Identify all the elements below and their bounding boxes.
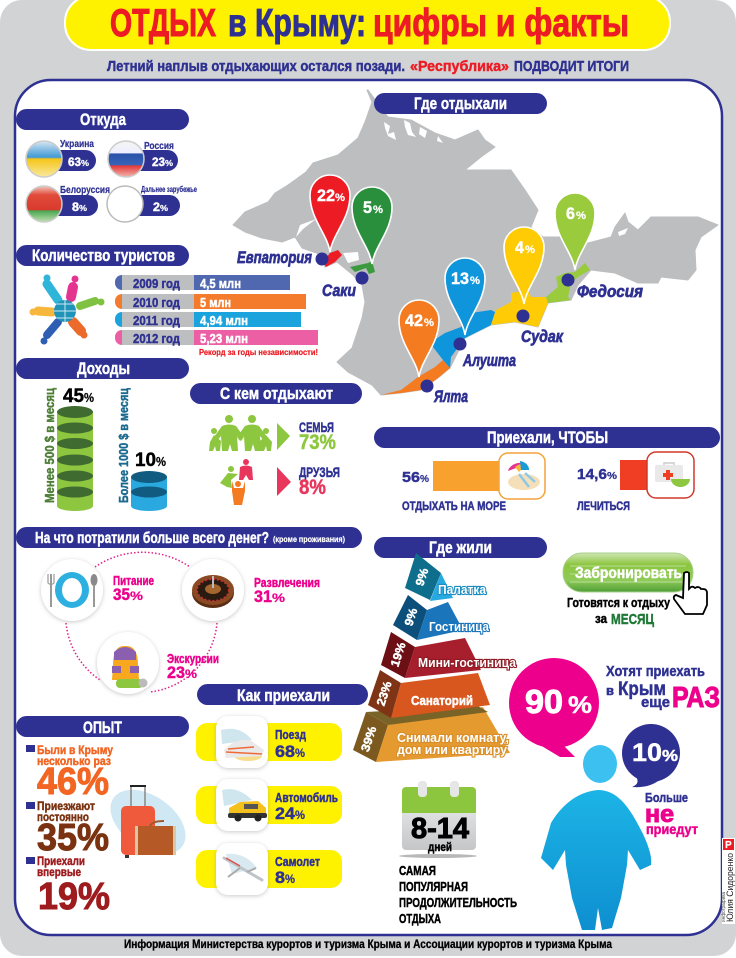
green stack 45%: 45	[63, 386, 84, 407]
tier: снимали комнату	[353, 706, 510, 762]
heading: С кем отдыхают: С кем отдыхают	[220, 384, 333, 403]
bar 2012: 2012 год	[133, 331, 181, 346]
heading: Как приехали: Как приехали	[237, 686, 330, 705]
icon: hand cursor	[674, 572, 707, 614]
label: food: %	[130, 589, 143, 603]
panel: with whom	[209, 415, 340, 505]
icon: calendar	[399, 781, 477, 858]
panel: transport	[196, 716, 342, 895]
Far abroad: Дальнее зарубежье	[141, 185, 197, 194]
person figure	[541, 745, 651, 930]
text: will not return: приедут	[646, 821, 698, 837]
stat: 35%: 35%	[37, 817, 109, 859]
stat: 35%: постоянно	[37, 810, 89, 824]
row: train	[196, 716, 342, 768]
green stack 45%	[42, 386, 94, 511]
bar 2012	[115, 330, 318, 346]
treatment stat: %	[607, 471, 617, 482]
Far abroad: 2	[153, 200, 160, 214]
row: car: 24	[275, 804, 296, 823]
row: car: %	[295, 808, 305, 822]
family label: 73%	[299, 431, 336, 454]
tier: снимали комнату: Снимали комнату,	[397, 730, 509, 745]
label: excursions: 23	[167, 663, 185, 682]
text: most popular duration: САМАЯ	[399, 863, 436, 878]
sea stat: 56	[402, 469, 420, 486]
text: booking a month ahead: Готовятся к отдыху	[567, 595, 671, 610]
tier: мини-гостиница: 19%	[388, 640, 409, 669]
panel: origin flags	[26, 139, 197, 222]
record note: Рекорд за годы независимости!	[199, 347, 318, 357]
friends label: 8%	[299, 476, 326, 499]
icon: roulette	[182, 559, 244, 621]
Russia	[108, 141, 178, 177]
credit: Юлия Сидоренко	[725, 853, 735, 922]
tier: санаторий: Санаторий	[411, 693, 473, 708]
text: most popular duration	[399, 863, 517, 926]
icon: suitcases	[99, 777, 197, 867]
icon: calendar: 8-14	[411, 813, 469, 845]
pin: Федосия 6%	[555, 193, 595, 270]
treatment stat: 14,6	[577, 466, 607, 483]
bar 2011: 4,94 млн	[200, 313, 248, 328]
stat: 19%	[26, 854, 110, 918]
heading: Доходы	[16, 358, 189, 379]
title: в Крыму:	[228, 2, 366, 45]
subtitle: «Республика»	[410, 58, 509, 75]
sea stat: ОТДЫХАТЬ НА МОРЕ	[402, 499, 506, 513]
bar chart: tourists by year	[115, 275, 318, 357]
text: will not return	[645, 790, 698, 837]
stat: 19%: 19%	[38, 876, 110, 918]
text: want to come again	[606, 663, 720, 714]
bar 2010: 2010 год	[133, 295, 181, 310]
pin: Федосия 6%: 6	[566, 204, 575, 223]
row: plane: Самолет	[275, 854, 320, 869]
text: want to come again: в	[606, 683, 614, 698]
family label	[299, 419, 336, 454]
bar 2010: 5 млн	[200, 295, 231, 310]
row: plane	[196, 843, 342, 895]
map of Crimea	[233, 90, 718, 395]
heading: Как приехали	[197, 684, 368, 705]
bubble: 90%: %	[568, 692, 592, 719]
row: train: 68	[275, 742, 295, 761]
pin: Саки 5%: 5	[363, 198, 372, 217]
title	[65, 0, 670, 50]
subtitle: Летний наплыв отдыхающих остался позади.	[107, 58, 405, 75]
text: most popular duration: ОТДЫХА	[399, 911, 441, 926]
label: entertainment	[254, 575, 320, 606]
label: food: Питание	[113, 573, 154, 588]
tier: палатка: Палатка	[438, 582, 487, 597]
text: want to come again: Хотят приехать	[606, 663, 705, 680]
row: plane: %	[285, 872, 295, 886]
arrow: family	[277, 423, 290, 450]
heading: Приехали, ЧТОБЫ: Приехали, ЧТОБЫ	[487, 428, 608, 447]
credit: инфографика	[721, 892, 727, 922]
text: will not return: Больше	[645, 790, 688, 805]
icon: backpack	[97, 632, 159, 694]
tier: снимали комнату: дом или квартиру	[397, 742, 508, 757]
heading: Откуда: Откуда	[80, 110, 126, 129]
Ukraine: %	[81, 159, 89, 168]
text: want to come again: еще	[641, 694, 670, 711]
bar 2009: 2009 год	[133, 276, 181, 291]
arrow: friends	[277, 467, 291, 496]
tier: мини-гостиница	[381, 632, 517, 678]
Ukraine: 63	[68, 155, 81, 169]
map city labels: Саки	[322, 281, 357, 300]
button: Забронировать	[563, 553, 693, 592]
dotted ring connecting spending icons	[66, 552, 217, 692]
row: train: Поезд	[275, 727, 307, 742]
Belarus	[26, 185, 110, 222]
text: want to come again: РАЗ	[672, 682, 720, 714]
Far abroad	[107, 185, 197, 222]
treatment stat: ЛЕЧИТЬСЯ	[577, 499, 630, 513]
pin: Саки 5%: %	[373, 204, 383, 216]
bubble: 10%	[622, 724, 680, 787]
heading: На что потратили: На что потратили больше всего денег?	[35, 530, 269, 547]
stat: 35%	[26, 799, 109, 859]
pin: Ялта 42%: 42	[405, 311, 423, 330]
credit: Р	[725, 840, 732, 851]
pin: Федосия 6%: %	[576, 210, 586, 222]
text: will not return: не	[645, 801, 674, 828]
bubble: 90%: 90	[525, 683, 563, 720]
Belarus: 8	[72, 200, 79, 214]
heading: Где жили	[374, 537, 547, 558]
pin: Судак 4%: %	[525, 244, 535, 256]
bar 2011	[115, 312, 301, 328]
label: excursions: Экскурсии	[167, 651, 219, 666]
Belarus: %	[79, 204, 87, 213]
bar 2010	[115, 294, 306, 310]
tier: палатка	[405, 553, 487, 601]
Russia: Россия	[144, 141, 174, 152]
icon: people around globe	[30, 274, 104, 344]
label: food	[113, 573, 154, 604]
label: entertainment: 31	[254, 587, 272, 606]
tier: палатка: 9%	[413, 566, 432, 588]
Russia: %	[165, 159, 173, 168]
stat: 19%: Приехали	[37, 854, 85, 868]
subtitle	[107, 58, 629, 75]
Far abroad: %	[160, 204, 168, 213]
credit	[721, 838, 735, 924]
tier: гостиница: Гостиница	[429, 619, 490, 634]
Ukraine: Украина	[60, 139, 94, 150]
pin: Саки 5%	[352, 187, 392, 264]
tier: мини-гостиница: Мини-гостиница	[418, 655, 517, 670]
Sivash white inlets	[296, 120, 628, 263]
text: want to come again: Крым	[618, 679, 666, 700]
label: entertainment: %	[272, 591, 285, 605]
Ukraine	[26, 139, 96, 177]
bar 2011: 2011 год	[133, 313, 181, 328]
label: excursions	[167, 651, 219, 682]
map city labels: Алушта	[462, 351, 516, 370]
title: ОТДЫХ	[110, 2, 216, 45]
pin: Ялта 42%: %	[424, 317, 434, 329]
text: booking a month ahead: МЕСЯЦ	[611, 611, 654, 628]
heading: Где жили: Где жили	[429, 538, 492, 557]
heading: ОПЫТ	[16, 716, 189, 737]
map city labels: Евпатория	[237, 248, 312, 267]
chart: income coin stacks	[42, 386, 167, 511]
panel: purpose	[402, 452, 694, 513]
tier: гостиница	[393, 595, 490, 640]
heading: Где отдыхали: Где отдыхали	[414, 94, 507, 113]
stat: 46%	[26, 743, 113, 803]
pin: Судак 4%	[504, 227, 544, 304]
pin: Евпатория 22%	[310, 175, 350, 252]
tier: гостиница: 9%	[402, 606, 421, 628]
text: booking a month ahead: за	[595, 611, 608, 626]
pin: Евпатория 22%: 22	[317, 186, 335, 205]
sea stat	[402, 453, 545, 513]
icon: calendar: дней	[428, 840, 452, 854]
treatment stat	[577, 452, 694, 513]
bubble: 10%: %	[662, 748, 678, 765]
label: excursions: %	[185, 667, 197, 681]
text: most popular duration: ПРОДОЛЖИТЕЛЬНОСТЬ	[399, 895, 517, 910]
blue stack 10%: %	[156, 454, 166, 469]
row: car	[196, 779, 342, 831]
row: plane: 8	[275, 868, 285, 887]
land outline	[233, 90, 718, 395]
tier: санаторий: 23%	[374, 679, 395, 708]
panel: spending	[41, 559, 320, 694]
heading: ОПЫТ: ОПЫТ	[83, 718, 122, 737]
blue stack 10%	[116, 388, 167, 511]
coloured regions	[323, 250, 342, 267]
green stack 45%: %	[84, 390, 94, 405]
icon: friends	[220, 459, 253, 505]
map city labels: Судак	[521, 327, 564, 346]
stat: 35%: Приезжают	[37, 799, 95, 813]
friends label	[299, 464, 340, 499]
heading: Доходы: Доходы	[77, 359, 130, 378]
heading: На что потратили: (кроме проживания)	[273, 535, 345, 544]
label: food: 35	[113, 585, 130, 604]
tier: санаторий	[368, 670, 490, 718]
bubble: 10%: 10	[632, 739, 662, 767]
Russia: 23	[152, 155, 165, 169]
stat: 46%: 46%	[37, 761, 109, 803]
button: Забронировать: Забронировать	[575, 565, 682, 582]
bubble: 90%	[509, 658, 599, 757]
text: most popular duration: ПОПУЛЯРНАЯ	[399, 879, 468, 894]
stat: 46%: несколько раз	[37, 754, 111, 768]
bar 2009: 4,5 млн	[200, 276, 241, 291]
map city labels: Федосия	[577, 282, 643, 301]
stat: 19%: впервые	[37, 865, 81, 879]
bar 2012: 5,23 млн	[200, 331, 248, 346]
friends label: ДРУЗЬЯ	[299, 464, 340, 480]
green stack 45%: Менее 500 $ в месяц	[42, 388, 57, 503]
panel: experience	[26, 743, 197, 918]
label: entertainment: Развлечения	[254, 575, 320, 590]
heading: Количество туристов: Количество туристов	[32, 246, 175, 265]
subtitle: ПОДВОДИТ ИТОГИ	[514, 58, 629, 75]
heading: Откуда	[16, 109, 189, 130]
pin: Алушта 13%: %	[470, 275, 480, 287]
icon: family	[209, 415, 272, 451]
title: цифры и факты	[373, 2, 629, 45]
pin: Алушта 13%: 13	[451, 269, 469, 288]
pin: Евпатория 22%: %	[335, 192, 345, 204]
sea stat: %	[420, 474, 429, 485]
heading: Приехали, ЧТОБЫ	[374, 427, 720, 448]
pin: Ялта 42%	[399, 300, 439, 377]
map city labels	[237, 248, 643, 406]
pyramid: accommodation	[353, 553, 517, 762]
text: booking a month ahead	[567, 595, 671, 628]
family label: СЕМЬЯ	[299, 419, 334, 435]
row: car: Автомобиль	[275, 790, 338, 805]
footer source: Информация Министерства курортов и туризма Крыма и Ассоциации курортов и туризма Крыма	[124, 939, 613, 951]
tier: снимали комнату: 39%	[358, 724, 379, 753]
icon: plate	[41, 559, 103, 621]
map city labels: Ялта	[433, 387, 468, 406]
pin: Алушта 13%	[445, 258, 485, 335]
blue stack 10%: 10	[135, 450, 156, 471]
stat: 46%: Были в Крыму	[37, 743, 113, 757]
heading: Где отдыхали	[374, 93, 547, 114]
blue stack 10%: Более 1000 $ в месяц	[116, 388, 131, 503]
bar 2009	[115, 275, 290, 291]
row: train: %	[295, 746, 305, 760]
Belarus: Белоруссия	[60, 185, 110, 196]
pin: Судак 4%: 4	[515, 238, 525, 257]
